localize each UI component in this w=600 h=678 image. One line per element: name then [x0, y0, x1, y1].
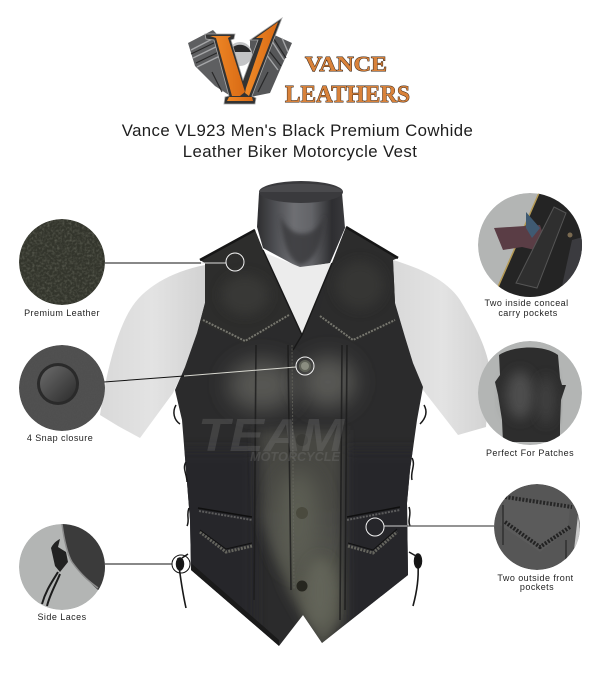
v-neck placket front edge: [263, 250, 332, 350]
callout: premium leather marker and line: [105, 253, 244, 271]
logo wordmark: VANCE: [305, 52, 387, 76]
callout: snap closure marker and line: [104, 357, 314, 382]
title: Vance VL923 Men's Black Premium Cowhide: [122, 121, 473, 140]
back of vest photo circle: [478, 341, 582, 445]
vest: [170, 227, 435, 660]
white t-shirt collar: [265, 253, 332, 335]
logo wordmark: [285, 52, 410, 108]
mannequin neck: [257, 181, 345, 268]
vest body: [175, 227, 423, 646]
panel: inside conceal carry pockets: [478, 193, 582, 318]
label: Premium Leather: [24, 308, 100, 318]
right pocket: [347, 507, 400, 553]
label: Two inside conceal: [484, 298, 569, 308]
label: carry pockets: [498, 308, 558, 318]
label: pockets: [520, 582, 554, 592]
callout: front pocket marker and line: [366, 518, 494, 536]
title: Leather Biker Motorcycle Vest: [183, 142, 417, 161]
label: Side Laces: [37, 612, 87, 622]
label: 4 Snap closure: [27, 433, 93, 443]
left pocket: [198, 508, 252, 552]
lapel braids: [203, 315, 395, 341]
panel: perfect for patches: [478, 341, 582, 458]
leather texture circle: [19, 219, 105, 305]
laces photo circle: [19, 520, 110, 610]
panel: snap closure: [19, 345, 105, 443]
label: Two outside front: [497, 573, 574, 583]
panel: outside front pockets: [494, 484, 582, 592]
panel: side laces: [19, 524, 105, 620]
pocket photo circle: [494, 484, 582, 570]
label: Perfect For Patches: [486, 448, 574, 458]
panel: premium leather: [19, 219, 105, 318]
leather shading: [184, 345, 414, 646]
watermark: Team Motorcycle: TEAM: [198, 409, 346, 461]
right lapel: [318, 227, 398, 343]
logo: Vance Leathers: [188, 18, 410, 108]
watermark: Team Motorcycle: MOTORCYCLE: [250, 449, 340, 464]
icon: engine behind V: [188, 30, 292, 97]
left lapel: [200, 230, 291, 344]
t-shirt sleeves: [100, 260, 490, 438]
logo wordmark: LEATHERS: [285, 82, 410, 108]
pistol pocket photo circle: [478, 193, 582, 297]
side laces: [174, 405, 426, 608]
callout: side laces marker and line: [105, 555, 190, 573]
snap buttons: [296, 360, 311, 592]
icon: orange V letter: [205, 18, 282, 104]
snap photo circle: [19, 345, 105, 431]
